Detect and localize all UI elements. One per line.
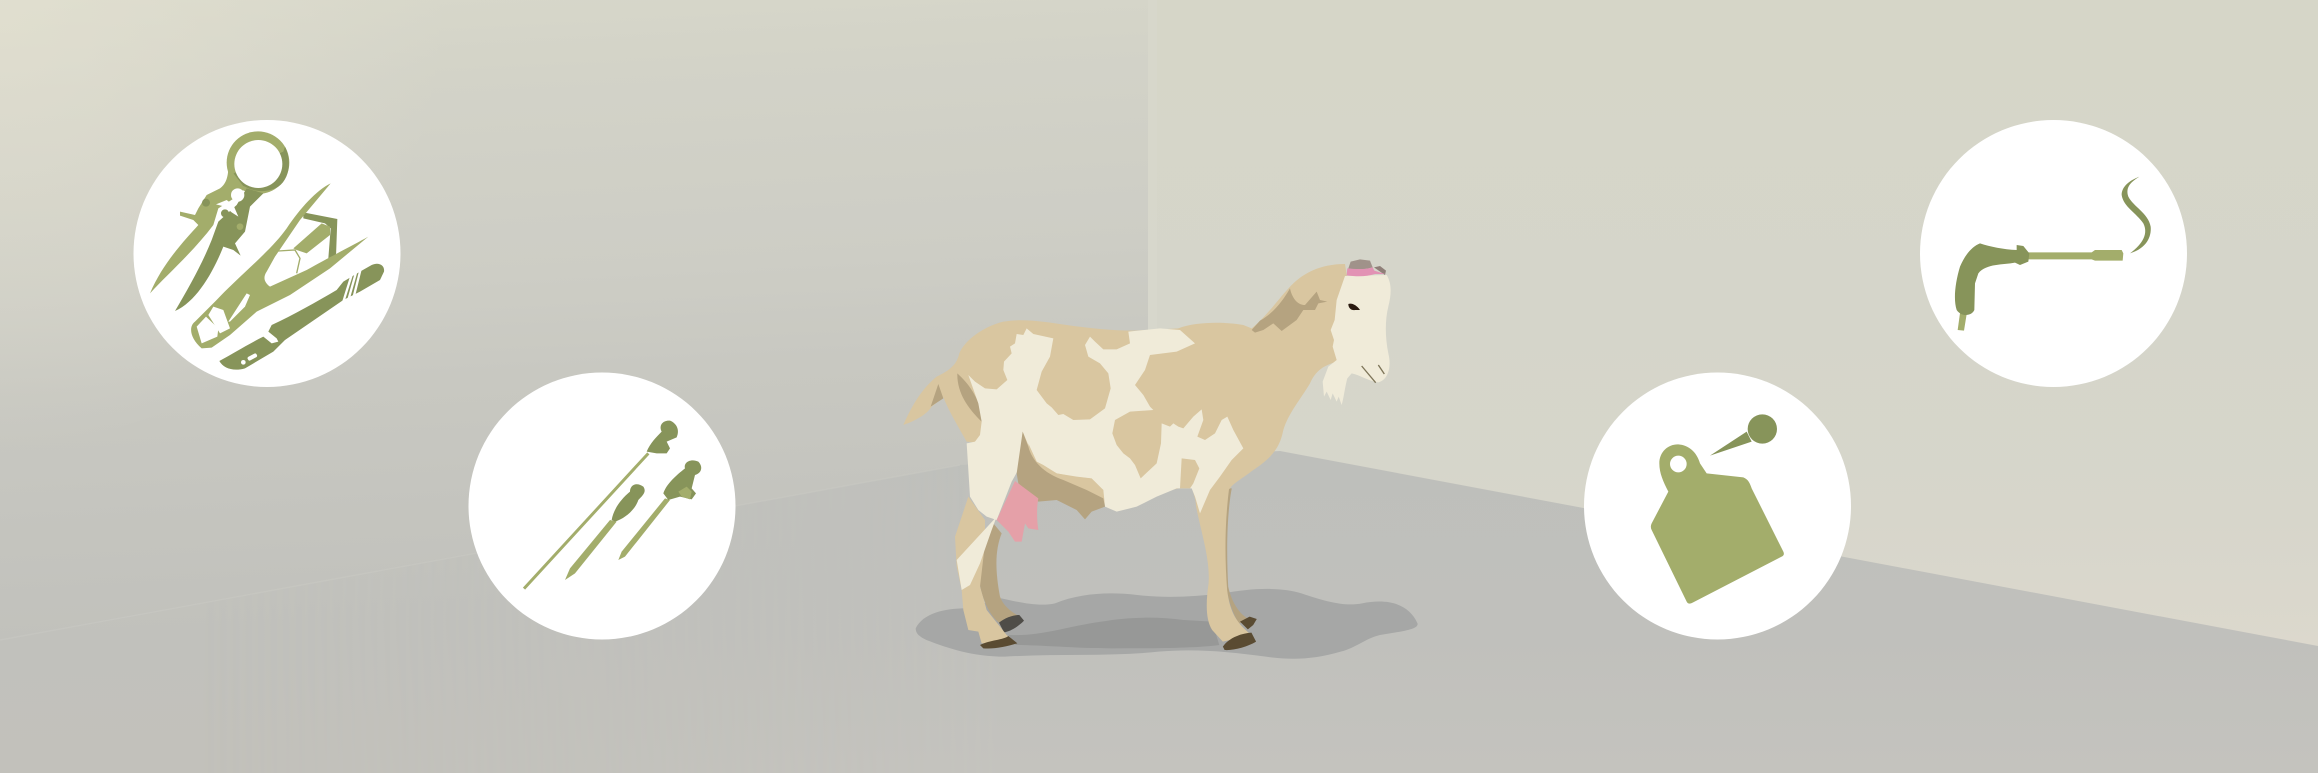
- icon: three needles: [524, 421, 701, 589]
- icon: pliers, clamp and scalpel: [150, 131, 384, 370]
- icon: ear tag and pin: [1651, 414, 1784, 604]
- body base coat: [903, 320, 1233, 508]
- clamp: [191, 183, 368, 348]
- panel: implant needles: [468, 372, 736, 640]
- near hind leg: [955, 497, 1017, 649]
- pin: [1710, 414, 1777, 456]
- eye: [1348, 304, 1360, 310]
- icon: disbudding iron with smoke: [1955, 177, 2151, 331]
- scalpel: [219, 264, 384, 370]
- iron stem: [2028, 250, 2123, 261]
- tag: [1651, 444, 1784, 604]
- front coat, neck and head: [1140, 259, 1391, 517]
- medium needle: [565, 484, 645, 580]
- shoulder patch: [1180, 458, 1199, 488]
- udder: [997, 481, 1038, 542]
- goat body, rear coordinates: [903, 259, 1391, 649]
- neck patch: [1252, 288, 1327, 333]
- tail and flank shading: [931, 373, 982, 422]
- panel: castration and surgical tools: [134, 120, 400, 387]
- panel: dehorning iron: [1920, 120, 2187, 387]
- cord: [1958, 308, 1967, 331]
- long needle: [524, 421, 678, 589]
- far hind leg: [978, 523, 1024, 632]
- chest and neck base: [1140, 264, 1353, 517]
- mouth: [1362, 365, 1384, 383]
- pliers: [150, 131, 289, 311]
- goat with shadow: [903, 259, 1418, 659]
- short needle: [618, 460, 701, 560]
- handle: [1955, 243, 2029, 315]
- smoke: [2122, 177, 2151, 253]
- front legs: [1194, 487, 1257, 650]
- cream coat patches: [967, 328, 1243, 520]
- head and beard: [1323, 275, 1391, 405]
- ground shadow: [916, 589, 1418, 659]
- belly shading: [1017, 432, 1105, 519]
- horn buds: [1347, 259, 1386, 276]
- panel: ear tag: [1584, 372, 1851, 640]
